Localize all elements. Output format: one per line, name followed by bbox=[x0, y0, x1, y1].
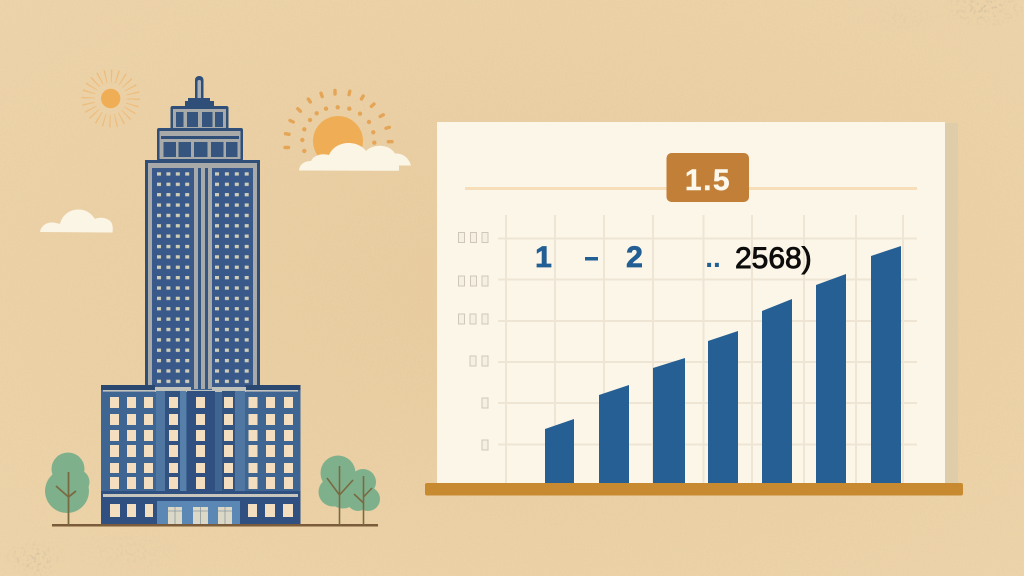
chart base shelf bbox=[425, 483, 963, 496]
chart subtitle text bbox=[535, 241, 812, 275]
chart subtitle text: .. bbox=[705, 242, 721, 273]
badge: value bbox=[666, 153, 749, 202]
chart grid bbox=[498, 215, 917, 483]
chart header rule bbox=[465, 187, 917, 190]
bar chart bbox=[545, 246, 901, 483]
icon: large sun with rays and cloud bbox=[285, 90, 411, 171]
axis labels: placeholder glyph boxes bbox=[458, 232, 488, 450]
lobby entrance bbox=[157, 501, 240, 525]
badge: value: 1.5 bbox=[685, 164, 731, 197]
icon: left tree bbox=[45, 452, 90, 525]
tower shaft with windows bbox=[145, 160, 260, 390]
icon: left cloud bbox=[40, 210, 113, 232]
icon: right trees bbox=[318, 456, 380, 525]
tower upper setback bbox=[157, 128, 243, 161]
building base bbox=[101, 385, 300, 525]
ground floor windows bbox=[110, 504, 293, 517]
building: skyscraper bbox=[101, 76, 300, 525]
chart subtitle text: 1 bbox=[535, 241, 552, 274]
chart subtitle text: 2 bbox=[626, 241, 643, 274]
chart subtitle text: 2568) bbox=[735, 242, 812, 275]
tower antenna and crown bbox=[170, 76, 228, 129]
ground line bbox=[52, 524, 378, 526]
base windows bbox=[114, 397, 288, 489]
icon: small sun bbox=[88, 76, 133, 121]
panel: chart board bbox=[437, 122, 958, 484]
